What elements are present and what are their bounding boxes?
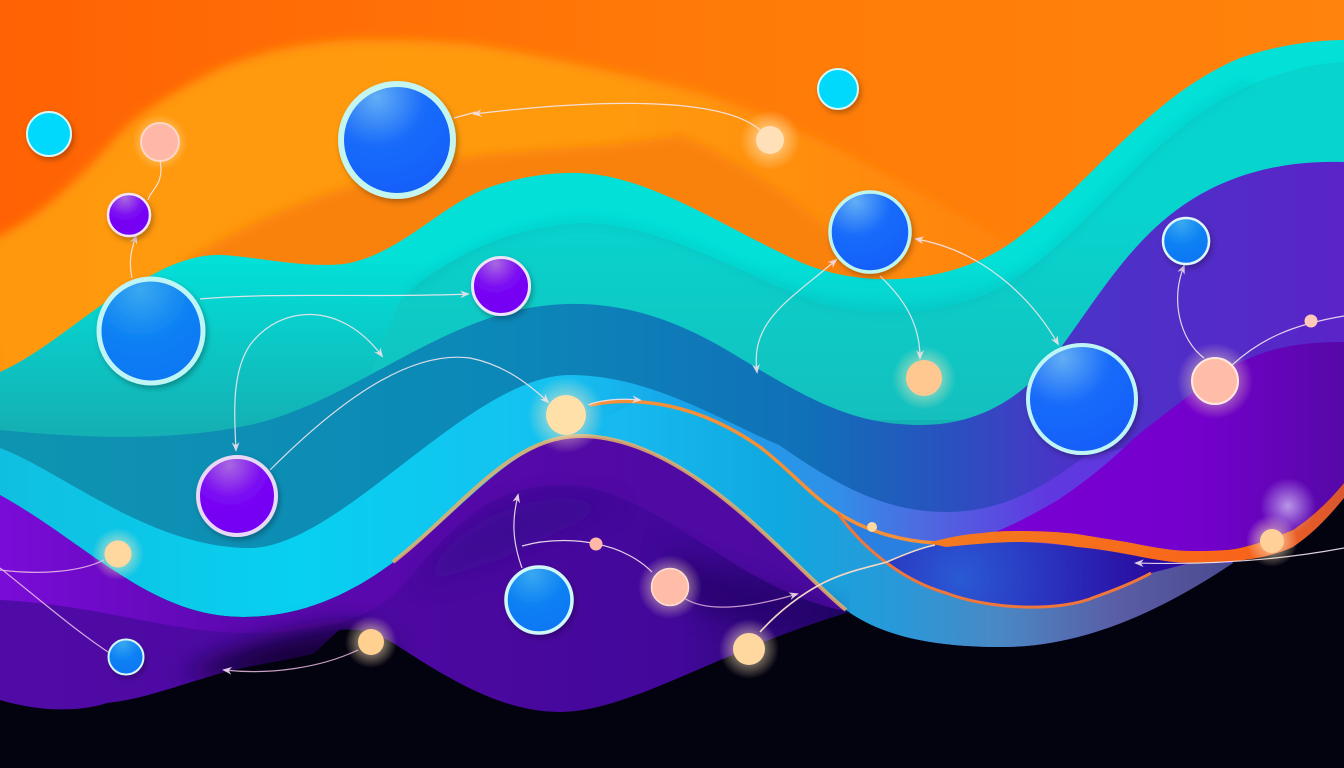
wave: golden contour <box>393 436 846 610</box>
wave: cyan band <box>0 375 1233 647</box>
node: cyan top centre <box>818 69 858 109</box>
small dot: lower centre <box>590 538 602 550</box>
node: large blue left <box>99 279 203 383</box>
wave: purple right <box>980 342 1344 551</box>
wave: lower crescent <box>580 400 1233 647</box>
wave: purple left upper <box>0 436 846 640</box>
glowing node: pink lower centre <box>638 555 702 619</box>
glowing node: teal <box>892 346 956 410</box>
wave: deep blue pocket <box>887 541 1190 607</box>
wave: blue and violet band <box>0 162 1344 590</box>
wave: light orange <box>0 40 1020 420</box>
wave: teal base <box>0 40 1344 480</box>
node: large blue right <box>1028 345 1136 453</box>
glowing node: small right dot <box>1304 314 1318 328</box>
wave: black base <box>0 420 1344 768</box>
glowing node: lower left <box>345 616 397 668</box>
glowing node: pink right <box>1177 343 1253 419</box>
glowing node: right ribbon <box>1246 515 1298 567</box>
glowing node: top <box>740 110 800 170</box>
glowing node: left <box>92 528 144 580</box>
wave: dark shadow inside purple <box>180 497 850 680</box>
connector arrows <box>0 103 1344 672</box>
node: purple small left <box>108 194 150 236</box>
glowing node: centre junction <box>528 377 604 453</box>
glow: haze right <box>1260 478 1316 534</box>
node: cyan top left <box>27 112 71 156</box>
wave: deeper orange lower band <box>180 135 900 310</box>
wave: purple left lower <box>0 485 850 720</box>
wave: small triangle between ribbons <box>838 513 935 562</box>
node: blue top right <box>1163 218 1209 264</box>
node: large blue top <box>341 84 453 196</box>
node: blue centre right <box>830 192 910 272</box>
wave: teal ridge shadow <box>410 83 1250 311</box>
node: blue lower centre <box>506 567 572 633</box>
node: purple lower left <box>198 457 276 535</box>
wave: teal inner body <box>360 62 1344 420</box>
node: purple centre <box>472 258 530 314</box>
node: pink top left <box>132 114 188 170</box>
flow lines: orange ribbons <box>590 401 1344 632</box>
glowing node: lower centre <box>719 619 779 679</box>
node: blue lower left <box>108 640 144 674</box>
small dot: ribbon <box>867 522 877 532</box>
